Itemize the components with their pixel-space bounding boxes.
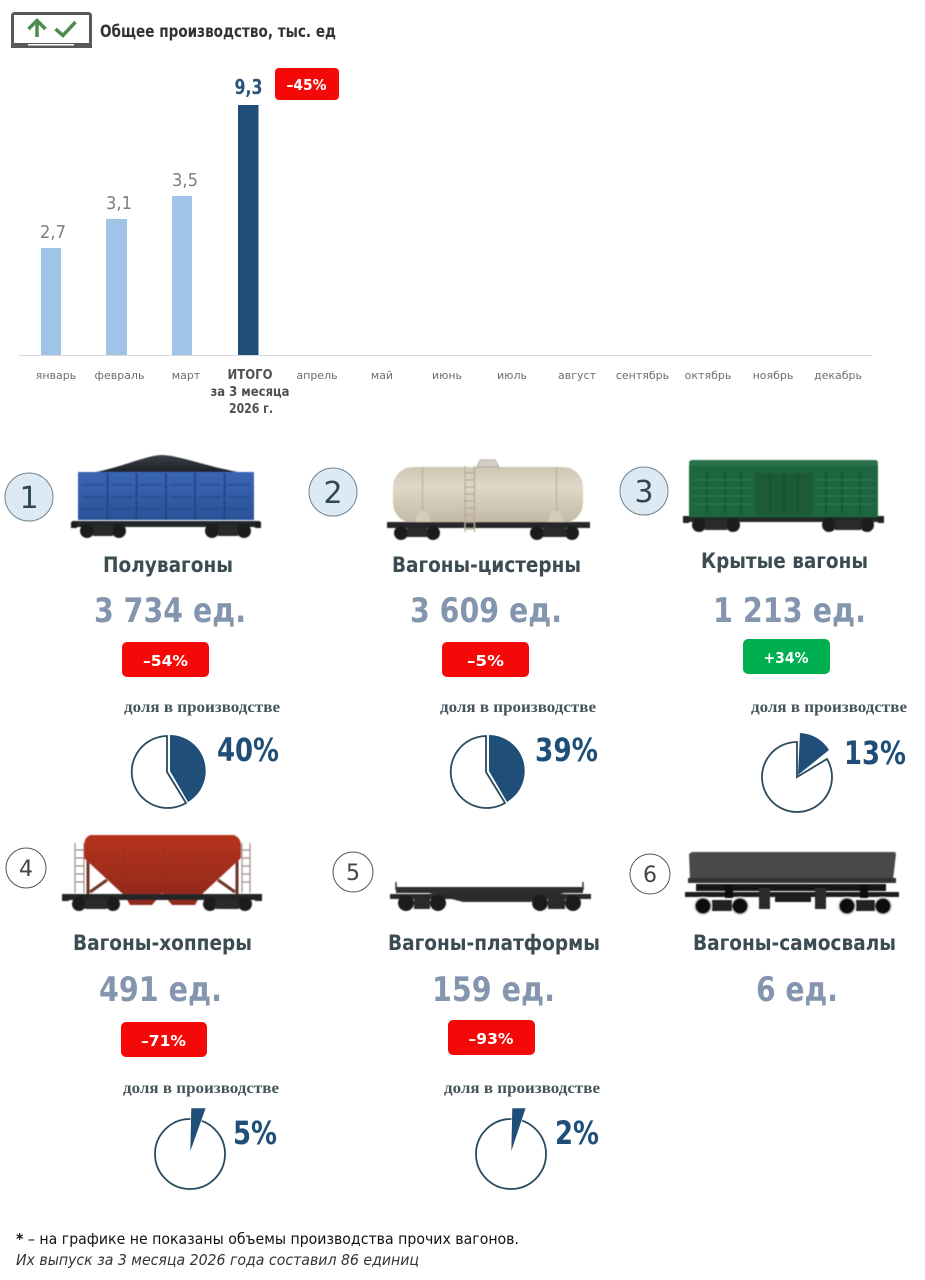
badge: change: –93% (468, 1030, 514, 1048)
icon: tank wagon (387, 460, 590, 540)
footnote line 2: Их выпуск за 3 месяца 2026 года составил 86 единиц (16, 1251, 419, 1269)
month labels: апрель (296, 369, 338, 382)
month labels: март (172, 369, 201, 382)
panel: flat wagons (333, 852, 600, 1189)
month labels: август (558, 369, 597, 382)
number badge 6: 6 (643, 863, 657, 888)
title: Вагоны-хопперы (73, 931, 252, 955)
value: 3 609 ед. (410, 591, 562, 631)
pie chart: 5% (155, 1108, 225, 1189)
value: 6 ед. (756, 970, 838, 1010)
badge: total change: –45% (286, 76, 326, 94)
pie chart: 13% (762, 733, 832, 812)
bar: March (172, 170, 198, 355)
month labels: май (371, 369, 393, 382)
month labels: ноябрь (753, 369, 793, 382)
number badge 1 (5, 473, 53, 521)
panel: tank wagons (309, 460, 598, 808)
value: 1 213 ед. (713, 591, 866, 631)
month labels: июнь (432, 369, 462, 382)
month labels (36, 369, 862, 382)
month labels: октябрь (685, 369, 731, 382)
bar: January: 2,7 (40, 222, 66, 243)
month labels: сентябрь (616, 369, 669, 382)
pie chart: 40% (132, 735, 206, 808)
icon: gondola wagon (71, 455, 261, 538)
badge: change: +34% (764, 649, 808, 667)
badge: total change (275, 68, 339, 100)
bar: January (40, 222, 66, 355)
share label: доля в производстве (124, 699, 280, 716)
footnote (16, 1230, 519, 1269)
share value: 13% (844, 734, 906, 772)
value: 3 734 ед. (94, 591, 246, 631)
badge: change: –5% (467, 652, 504, 670)
panel: dump wagons (630, 852, 899, 1010)
number badge 1: 1 (19, 481, 39, 516)
value: 159 ед. (432, 970, 555, 1010)
number badge 5 (333, 852, 373, 892)
share label: доля в производстве (751, 699, 907, 716)
title: Крытые вагоны (701, 549, 868, 573)
total axis label: за 3 месяца (210, 385, 290, 400)
badge: change: –71% (141, 1032, 186, 1050)
number badge 2 (309, 468, 357, 516)
icon: covered wagon (683, 460, 884, 532)
header: production title (11, 14, 336, 48)
number badge 3: 3 (634, 475, 654, 510)
number badge 5: 5 (346, 861, 360, 886)
number badge 4 (6, 848, 46, 888)
panel: covered wagons (620, 460, 907, 812)
heading: Общее производство, тыс. ед (100, 22, 336, 42)
month labels: январь (36, 369, 76, 382)
total axis label (210, 368, 290, 417)
total axis label: ИТОГО (228, 368, 272, 383)
number badge 2: 2 (323, 476, 343, 511)
share label: доля в производстве (440, 699, 596, 716)
month labels: июль (497, 369, 527, 382)
title: Вагоны-платформы (388, 931, 600, 955)
icon: hopper wagon (62, 835, 262, 911)
share value: 39% (535, 731, 598, 769)
month labels: февраль (95, 369, 144, 382)
pie chart: 39% (451, 735, 525, 808)
icon: flat wagon (390, 882, 591, 911)
pie chart: 2% (476, 1108, 546, 1189)
icon: dump wagon (685, 852, 899, 914)
title: Вагоны-самосвалы (693, 931, 896, 955)
share value: 5% (233, 1114, 277, 1152)
badge: change (442, 642, 529, 677)
title: Вагоны-цистерны (392, 553, 581, 577)
bar chart: monthly production (19, 68, 872, 417)
bar: March: 3,5 (172, 170, 198, 191)
share value: 2% (555, 1114, 599, 1152)
badge: change (121, 1022, 207, 1057)
number badge 4: 4 (19, 857, 33, 882)
share label: доля в производстве (123, 1080, 279, 1097)
bar: February: 3,1 (106, 193, 132, 214)
number badge 6 (630, 854, 670, 894)
footnote line 1: * – на графике не показаны объемы производства прочих вагонов. (16, 1230, 519, 1248)
panel: hopper wagons (6, 835, 279, 1189)
month labels: декабрь (814, 369, 862, 382)
number badge 3 (620, 467, 668, 515)
badge: change (122, 642, 209, 677)
bar: February (106, 193, 132, 355)
share value: 40% (217, 731, 279, 769)
badge: change: –54% (143, 652, 188, 670)
panel: gondola wagons (5, 455, 280, 808)
share label: доля в производстве (444, 1080, 600, 1097)
bar: total for 3 months (234, 75, 262, 355)
value: 491 ед. (99, 970, 222, 1010)
total axis label: 2026 г. (229, 402, 273, 417)
badge: change (448, 1020, 535, 1055)
icon: monitor with arrow and check (11, 14, 92, 48)
axis line (19, 355, 872, 356)
bar: total for 3 months: 9,3 (234, 75, 262, 99)
badge: change (743, 639, 830, 674)
title: Полувагоны (103, 553, 233, 577)
